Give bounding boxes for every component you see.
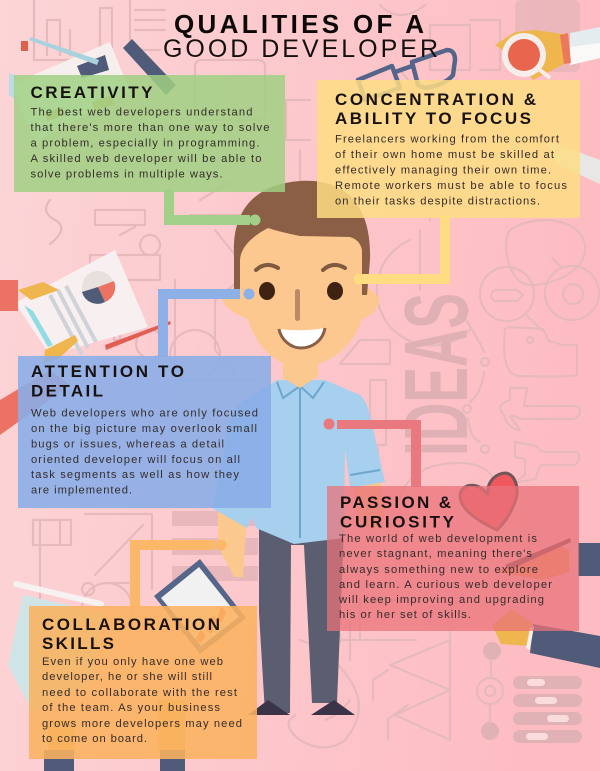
panel: passion and curiosity bbox=[327, 486, 579, 631]
icon: document bottom left bbox=[8, 584, 103, 713]
panel: concentration: effectively managing their own time. bbox=[335, 165, 551, 177]
icon: tablet bbox=[154, 559, 246, 654]
character bbox=[212, 181, 385, 715]
icon: hand bottom right bbox=[492, 609, 600, 668]
panel: concentration bbox=[317, 80, 580, 218]
panel: concentration: CONCENTRATION & bbox=[335, 90, 536, 109]
connector: concentration bbox=[354, 216, 450, 284]
panel: creativity: a problem, especially in programming. bbox=[30, 138, 260, 150]
panel: creativity bbox=[14, 75, 285, 192]
panel: attention to detail: are implemented. bbox=[31, 485, 132, 497]
panel: collaboration skills: of the team. As your business bbox=[42, 702, 220, 714]
panel: attention to detail: oriented developer will focus on all bbox=[31, 454, 240, 466]
panel: concentration: on their tasks despite distractions. bbox=[335, 196, 540, 208]
panel: attention to detail: bugs or issues, whereas a detail bbox=[31, 438, 224, 450]
icon: heart bbox=[460, 473, 517, 530]
panel: concentration: Freelancers working from the comfort bbox=[335, 134, 560, 146]
panel: passion and curiosity: The world of web development is bbox=[339, 533, 537, 545]
title: QUALITIES OF A bbox=[174, 9, 424, 39]
panel: collaboration skills: developer, he or she will still bbox=[42, 671, 212, 683]
character: hair bbox=[234, 181, 370, 295]
icon: report chart with hand bbox=[0, 250, 171, 435]
panel: concentration: ABILITY TO FOCUS bbox=[335, 109, 531, 128]
icon: document with pencil and ruler bbox=[9, 37, 176, 142]
icon: coffee cup and hand bbox=[495, 27, 600, 80]
character: pants bbox=[259, 528, 344, 713]
connector: collaboration bbox=[130, 540, 226, 607]
character: nose bbox=[295, 289, 300, 321]
icon: pen and hand top right bbox=[546, 140, 600, 184]
character: ears and face bbox=[222, 225, 379, 367]
character: mouth bbox=[279, 328, 325, 348]
panel: collaboration skills: Even if you only have one web bbox=[42, 656, 223, 668]
panel: passion and curiosity: and learn. A curious web developer bbox=[339, 579, 552, 591]
panel: passion and curiosity: never stagnant, meaning there's bbox=[339, 548, 532, 560]
character: right hand bbox=[353, 474, 384, 530]
panel: attention to detail: task segments as well as how they bbox=[31, 469, 239, 481]
icon: glasses bbox=[358, 50, 455, 100]
panel: concentration: Remote workers must be able to focus bbox=[335, 180, 567, 192]
panel: creativity: A skilled web developer will be able to bbox=[30, 153, 262, 165]
panel: collaboration skills: COLLABORATION bbox=[42, 615, 220, 634]
panel: collaboration skills: grows more developers may need bbox=[42, 718, 242, 730]
connector: passion bbox=[324, 418, 421, 487]
icon: hands bottom left bbox=[44, 700, 185, 771]
panel: passion and curiosity: always something new to explore bbox=[339, 564, 538, 576]
connector: creativity bbox=[164, 190, 260, 226]
title: GOOD DEVELOPER bbox=[163, 35, 438, 63]
character: eyebrows bbox=[256, 265, 345, 270]
panel: creativity: solve problems in multiple ways. bbox=[30, 168, 222, 180]
connector: attention bbox=[158, 288, 254, 357]
panel: collaboration skills: to come on board. bbox=[42, 733, 147, 745]
panel: attention to detail: Web developers who are only focused bbox=[31, 408, 258, 420]
panel: creativity: that there's more than one way to solve bbox=[30, 122, 270, 134]
panel: passion and curiosity: his or her set of skills. bbox=[339, 609, 471, 621]
panel: collaboration skills bbox=[29, 606, 257, 759]
panel: attention to detail: on the big picture may overlook small bbox=[31, 423, 257, 435]
panel: attention to detail bbox=[18, 356, 271, 508]
title bbox=[163, 9, 438, 63]
panel: attention to detail: ATTENTION TO bbox=[31, 362, 184, 381]
character: shoes bbox=[248, 700, 355, 715]
word: IDEAS: IDEAS bbox=[387, 293, 487, 456]
panel: creativity: The best web developers understand bbox=[30, 107, 253, 119]
character: left hand bbox=[218, 505, 248, 577]
character: shirt bbox=[212, 380, 385, 544]
panel: passion and curiosity: CURIOSITY bbox=[340, 513, 455, 532]
panel: creativity: CREATIVITY bbox=[30, 83, 153, 102]
panel: passion and curiosity: will keep improving and upgrading bbox=[338, 594, 544, 606]
character: neck bbox=[283, 350, 318, 388]
icon: pen and hand right bbox=[497, 538, 600, 580]
panel: concentration: of their own home must be skilled at bbox=[335, 149, 555, 161]
panel: collaboration skills: SKILLS bbox=[42, 634, 114, 653]
panel: collaboration skills: need to collaborate with the rest bbox=[42, 687, 238, 699]
panel: passion and curiosity: PASSION & bbox=[340, 493, 451, 512]
character: eyes bbox=[259, 282, 343, 300]
panel: attention to detail: DETAIL bbox=[31, 382, 103, 401]
